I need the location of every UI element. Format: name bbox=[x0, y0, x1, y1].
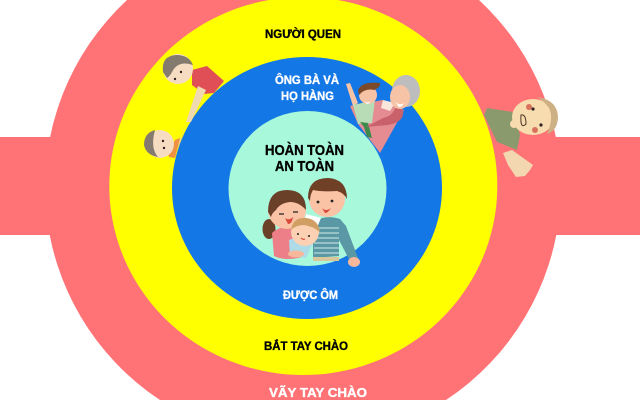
baby bbox=[288, 218, 320, 258]
label: fully safe: HOÀN TOÀN bbox=[265, 142, 344, 159]
label: handshake greeting: BẮT TAY CHÀO bbox=[264, 338, 348, 353]
label: grandparents and relatives: HỌ HÀNG bbox=[281, 88, 334, 103]
illustration: grandmother holding child bbox=[346, 75, 420, 153]
mom bbox=[262, 190, 306, 259]
label: grandparents and relatives bbox=[275, 72, 339, 103]
illustration: boy outside the circle bbox=[484, 97, 558, 177]
inner circle: fully safe bbox=[228, 111, 386, 266]
label: wave greeting: VÃY TAY CHÀO bbox=[269, 385, 367, 400]
blue ring: relatives bbox=[172, 57, 442, 319]
label: fully safe: AN TOÀN bbox=[275, 158, 334, 175]
dad bbox=[304, 178, 360, 267]
illustration: family bbox=[262, 178, 360, 267]
label: acquaintances: NGƯỜI QUEN bbox=[265, 26, 341, 41]
label: hugged: ĐƯỢC ÔM bbox=[283, 287, 338, 302]
yellow ring: acquaintances bbox=[109, 0, 497, 375]
label: grandparents and relatives: ÔNG BÀ VÀ bbox=[275, 72, 339, 87]
illustration: two people shaking hands bbox=[144, 54, 224, 158]
label: fully safe bbox=[265, 142, 344, 175]
